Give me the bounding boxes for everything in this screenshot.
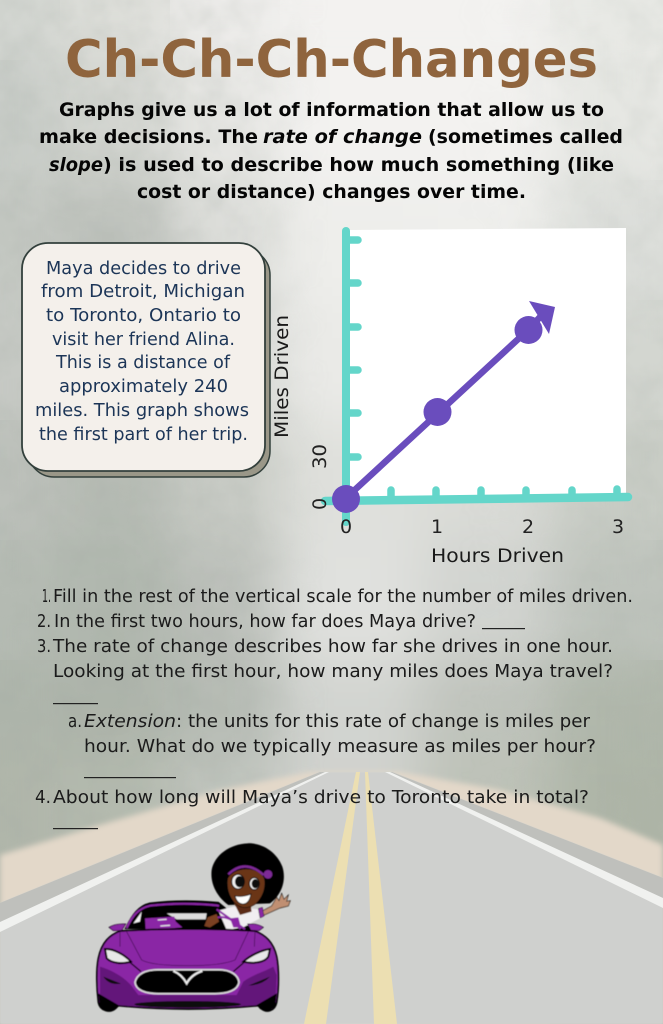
question 1: Fill in the rest of the vertical scale for the number of miles driven. (53, 587, 633, 607)
right eye (249, 878, 259, 890)
intro paragraph: slope (49, 154, 103, 176)
card text: the first part of her trip. (39, 425, 248, 445)
cabin interior (126, 901, 252, 930)
question 1: 1. (42, 587, 51, 607)
yellow centre lines (304, 772, 397, 1024)
card text (35, 259, 249, 445)
lower body shading (100, 967, 277, 1008)
road edge lines (0, 772, 663, 932)
left headlight (105, 949, 131, 963)
question 4: About how long will Maya’s drive to Toronto take in total? (53, 788, 589, 808)
intro paragraph: rate of change (263, 126, 422, 148)
roadside shoulders (0, 772, 663, 1024)
question 3a: hour. What do we typically measure as miles per hour? (84, 737, 596, 757)
road surface (0, 772, 663, 1024)
x-axis numbers: 2 (522, 516, 534, 538)
upper car and driver (109, 843, 290, 931)
side vents (103, 977, 270, 986)
x-axis numbers: 1 (431, 516, 443, 538)
card text: miles. This graph shows (35, 401, 249, 421)
air intake (134, 1001, 241, 1008)
question 3: The rate of change describes how far she drives in one hour. (52, 637, 613, 657)
trend line with arrow (346, 316, 541, 498)
hair (211, 843, 284, 905)
intro paragraph: (sometimes called (428, 126, 623, 148)
x-axis numbers (340, 516, 624, 538)
question 3 (37, 637, 613, 704)
illustration: Maya waving from purple car (97, 843, 290, 1011)
left mirror (109, 924, 126, 931)
headlight to grille lines (130, 962, 244, 972)
question 2: 2. (37, 612, 51, 632)
body outline (97, 929, 278, 1011)
smile (235, 894, 251, 904)
wheels (98, 993, 277, 1011)
intro paragraph: ) is used to describe how much something (like (103, 154, 614, 176)
box highlights (158, 919, 170, 926)
road edge shadow (0, 772, 663, 925)
shirt accent (230, 917, 241, 927)
x-axis title: Hours Driven (431, 546, 564, 567)
question 3a (68, 712, 596, 778)
questions (35, 587, 633, 829)
right headlight (243, 949, 270, 963)
panel: story card (22, 243, 270, 477)
plot area (350, 228, 626, 500)
card text: visit her friend Alina. (52, 330, 235, 350)
roof rim (127, 904, 219, 928)
intro paragraph (39, 99, 623, 203)
x-axis numbers: 0 (340, 516, 352, 538)
left window glare (133, 912, 142, 923)
data points (332, 316, 542, 513)
lower car body (97, 929, 278, 1011)
right pillar (217, 909, 245, 929)
question 2: In the first two hours, how far does Maya drive? (54, 612, 476, 632)
intro paragraph: cost or distance) changes over time. (137, 181, 526, 203)
y-axis number thirty: 30 (309, 444, 331, 469)
badge (173, 971, 202, 983)
question 3a: : the units for this rate of change is miles per (176, 712, 591, 732)
sleeve cuff (258, 907, 264, 918)
card text: This is a distance of (55, 353, 231, 373)
question 3: 3. (37, 637, 51, 657)
purple boxes on dash (145, 917, 182, 930)
x-axis numbers: 3 (612, 516, 624, 538)
card text: approximately 240 (59, 377, 228, 397)
card text: from Detroit, Michigan (41, 282, 245, 302)
waving arm (262, 893, 290, 915)
hood lines (120, 932, 255, 966)
card text: Maya decides to drive (46, 259, 241, 279)
right mirror (248, 924, 263, 931)
y-axis title: Miles Driven (271, 315, 293, 438)
grille (135, 970, 239, 994)
y-axis number zero: 0 (309, 498, 331, 510)
neck (233, 902, 252, 915)
question 3a: Extension (84, 712, 176, 732)
left eye (232, 874, 244, 889)
title: Ch-Ch-Ch-Changes (65, 30, 598, 90)
card face (22, 243, 265, 471)
shirt (218, 907, 262, 930)
face (227, 869, 265, 908)
headband (228, 866, 264, 875)
flower (264, 870, 272, 879)
driver forearm (204, 914, 219, 927)
card shadow (28, 249, 270, 477)
steering wheel (218, 917, 240, 929)
tree mottling (96, 2, 245, 207)
line graph (271, 228, 628, 567)
card text: to Toronto, Ontario to (46, 306, 241, 326)
question 4 (35, 788, 589, 829)
intro paragraph: Graphs give us a lot of information that allow us to (59, 99, 604, 121)
intro paragraph: make decisions. The (39, 126, 258, 148)
rear window highlight (167, 913, 207, 919)
question 4: 4. (35, 788, 51, 808)
axes and ticks (325, 231, 628, 522)
question 3: Looking at the first hour, how many miles does Maya travel? (53, 662, 613, 682)
question 3a: a. (68, 712, 82, 732)
